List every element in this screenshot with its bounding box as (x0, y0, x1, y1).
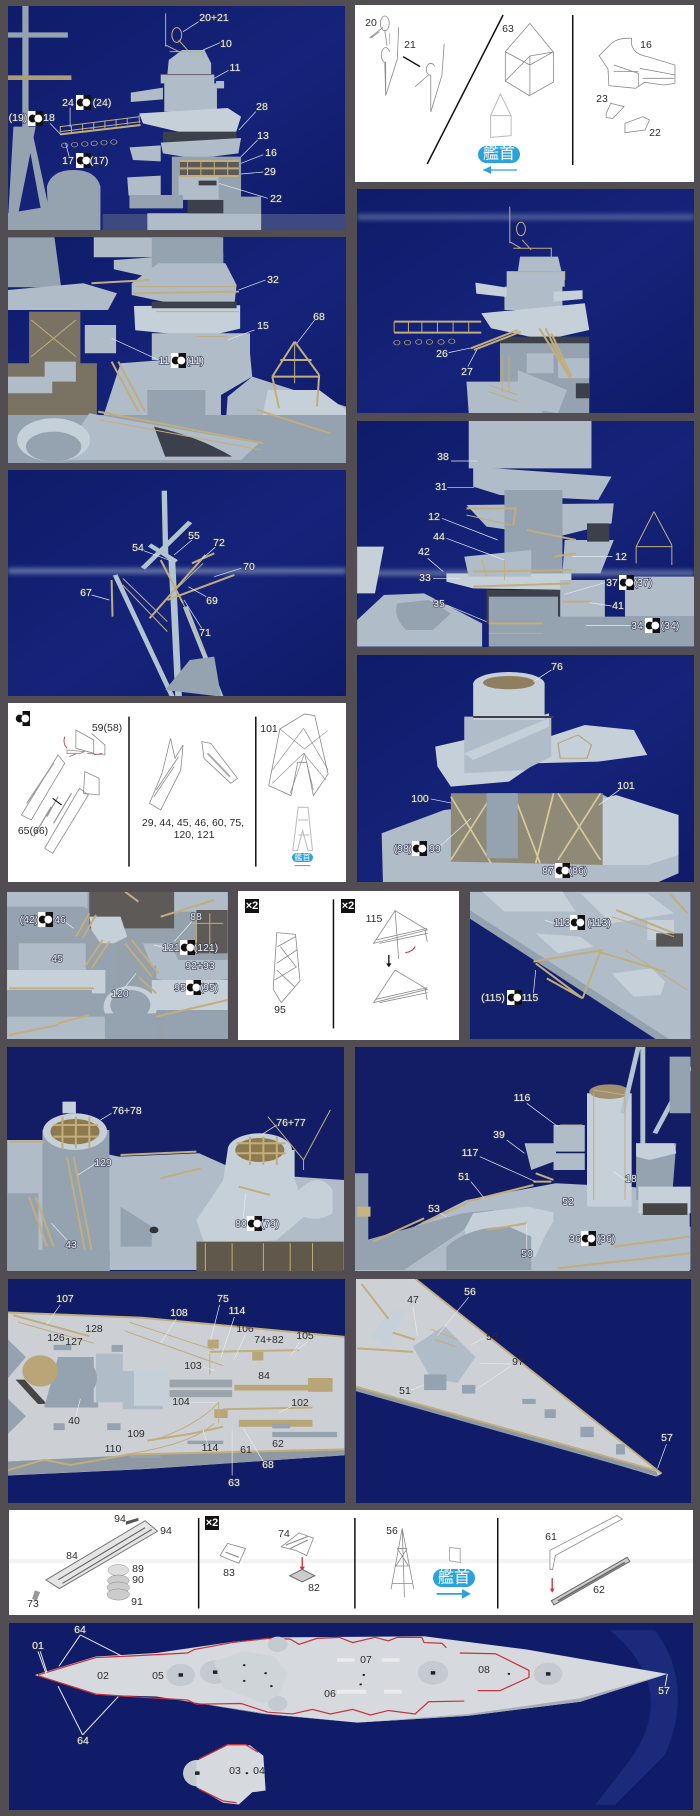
direction pill: bow: 艦首 (483, 144, 515, 162)
panel: diagram ladders and lattice mast (8, 703, 346, 882)
panel: crane on hull photo (470, 891, 691, 1040)
part labels on deck: 08 (478, 1664, 490, 1676)
part labels on deck (399, 1294, 524, 1397)
leaders (449, 348, 477, 367)
leaders (411, 1297, 666, 1468)
leaders (50, 22, 268, 198)
part labels: (37) (634, 577, 652, 589)
line art (21, 714, 328, 867)
part labels: 115 (522, 992, 539, 1004)
part labels: 37 (606, 577, 618, 589)
part labels on deck: 126 (47, 1332, 65, 1344)
photo backdrop (8, 6, 345, 230)
panel: full ship top view photo (9, 1623, 693, 1810)
photo backdrop (8, 237, 346, 415)
part labels: 13 (257, 130, 269, 142)
part labels: 18 (625, 1173, 637, 1185)
part labels on deck (47, 1323, 314, 1456)
direction pill: bow: 艦首 (294, 852, 310, 862)
model: bow (356, 1279, 662, 1476)
panel: deck detail photo (7, 892, 228, 1040)
part labels on deck: 109 (127, 1428, 145, 1440)
part labels on deck: 104 (172, 1396, 190, 1408)
part labels (365, 17, 661, 139)
paper fold (357, 214, 694, 220)
part labels: 92+93 (185, 960, 215, 972)
part labels: 76+77 (276, 1117, 306, 1129)
part labels: 34 (631, 620, 643, 632)
part labels: (121) (194, 942, 218, 954)
part labels: 68 (262, 1459, 274, 1471)
part labels: 56 (464, 1286, 476, 1298)
part labels: 12 (615, 551, 627, 563)
panel: tower with searchlight platform (357, 189, 694, 413)
part labels: 94 (114, 1513, 126, 1525)
leaders (428, 461, 630, 626)
part labels: 62 (593, 1584, 605, 1596)
part labels: (113) (587, 917, 611, 929)
part labels: 11 (230, 62, 241, 74)
part labels: 31 (435, 481, 447, 493)
part labels: 18 (43, 112, 55, 124)
part labels: 84 (66, 1550, 78, 1562)
leaders (38, 1635, 667, 1735)
photo backdrop (470, 891, 691, 1039)
part labels on deck: 110 (105, 1443, 122, 1455)
part labels (65, 1105, 306, 1251)
model: hull, turret and funnel (355, 1047, 691, 1277)
part labels: 120, 121 (174, 829, 215, 841)
part labels: 32 (267, 274, 279, 286)
part labels: 57 (658, 1685, 670, 1697)
part labels: (11) (186, 355, 204, 367)
part labels: 67 (80, 587, 92, 599)
x2 badge right: ×2 (342, 900, 354, 912)
line art (370, 15, 675, 174)
part labels: (98) (394, 843, 412, 855)
part labels: 35 (433, 598, 445, 610)
diagram background (238, 891, 459, 1040)
part labels: 56 (386, 1525, 398, 1537)
part labels (464, 1286, 673, 1444)
part labels: 76 (551, 661, 563, 673)
part labels: 42 (418, 546, 430, 558)
part labels: 61 (545, 1531, 557, 1543)
part labels on deck: 40 (68, 1415, 80, 1427)
part labels: 72 (213, 537, 225, 549)
part labels: 129 (94, 1157, 112, 1169)
part labels on deck: 103 (184, 1360, 202, 1372)
part labels: 51 (458, 1171, 470, 1183)
part labels (32, 1624, 670, 1747)
marker icon (15, 711, 30, 726)
part labels: 36 (569, 1233, 581, 1245)
leaders (51, 1113, 277, 1240)
part labels on deck: 61 (240, 1444, 252, 1456)
part labels: (115) (481, 992, 505, 1004)
part labels: 20+21 (199, 12, 229, 24)
part labels on deck: 03 (229, 1765, 241, 1777)
part labels: 76+78 (112, 1105, 142, 1117)
x2 badge left: ×2 (246, 900, 258, 912)
part labels: 59(58) (92, 722, 122, 734)
leaders (440, 1103, 627, 1250)
part labels on deck: 106 (236, 1323, 254, 1335)
part labels (80, 530, 255, 639)
part labels: 68 (313, 311, 325, 323)
part labels on deck: 47 (407, 1294, 419, 1306)
part labels: 11 (159, 355, 170, 367)
part labels: 117 (462, 1147, 479, 1159)
model: tower (394, 207, 589, 413)
photo backdrop (9, 1623, 693, 1810)
part labels (18, 722, 278, 841)
panel: diagram parts 95 and 115 (238, 891, 459, 1040)
part labels on deck: 114 (202, 1442, 219, 1454)
part labels: 100 (411, 793, 429, 805)
part labels: (17) (90, 155, 108, 167)
part labels on deck: 105 (296, 1330, 314, 1342)
part labels on deck: 102 (291, 1397, 309, 1409)
part labels: 63 (228, 1477, 240, 1489)
photo backdrop (7, 1047, 344, 1271)
part labels: (19) (9, 112, 27, 124)
part labels: 43 (65, 1239, 77, 1251)
photo backdrop (357, 189, 694, 413)
part labels: (34) (661, 620, 679, 632)
leaders (92, 540, 241, 628)
part labels: 16 (265, 147, 277, 159)
part labels: 17 (62, 155, 74, 167)
part labels: 10 (220, 38, 232, 50)
leaders (431, 670, 621, 847)
part labels: (95) (200, 982, 218, 994)
panel: deck from above photo (6, 1279, 345, 1503)
part labels (394, 661, 635, 878)
part labels (274, 913, 383, 1016)
part labels on deck: 127 (65, 1336, 83, 1348)
part labels: 28 (256, 101, 268, 113)
part labels: (36) (597, 1233, 615, 1245)
part labels: 21 (404, 39, 416, 51)
part labels: 45 (51, 953, 63, 965)
part labels: 46 (54, 914, 66, 926)
diagram background (8, 703, 346, 882)
part labels: 115 (366, 913, 383, 925)
panel: funnel and lattice photo (357, 655, 694, 885)
part labels: 120 (111, 988, 129, 1000)
part labels: 63 (502, 23, 514, 35)
part labels: 64 (74, 1624, 86, 1636)
leaders (47, 1305, 308, 1475)
part labels: 27 (461, 366, 473, 378)
paper fold (357, 570, 694, 576)
part labels (56, 1293, 274, 1489)
panel: aft superstructure photo (355, 1047, 691, 1277)
part labels on deck: 04 (253, 1765, 265, 1777)
velvet highlight (595, 1630, 678, 1805)
photo backdrop (355, 1047, 691, 1271)
panel: funnels close-up photo (7, 1047, 344, 1272)
part labels (428, 1092, 637, 1260)
part labels: 23 (596, 93, 608, 105)
photo backdrop (8, 470, 346, 696)
part labels: 83 (223, 1567, 235, 1579)
part labels on deck: 05 (152, 1670, 164, 1682)
part labels: 107 (56, 1293, 74, 1305)
leaders (533, 920, 554, 993)
part labels: 89 (132, 1563, 144, 1575)
part labels: 29, 44, 45, 46, 60, 75, (142, 817, 244, 829)
panel: bridge tower photo top (8, 5, 346, 230)
part labels on deck: 62 (272, 1438, 284, 1450)
part labels: 101 (260, 723, 278, 735)
part labels: 39 (493, 1129, 505, 1141)
part labels (159, 274, 325, 368)
part labels: 44 (433, 531, 445, 543)
part labels on deck (97, 1654, 490, 1777)
part labels on deck: 128 (85, 1323, 103, 1335)
part labels: 114 (229, 1305, 246, 1317)
part labels on deck: 06 (324, 1688, 336, 1700)
photo backdrop (356, 1279, 691, 1503)
leaders (112, 280, 315, 360)
part labels: 95 (274, 1004, 286, 1016)
part labels on deck: 97 (512, 1356, 524, 1368)
part labels: 82 (308, 1582, 320, 1594)
part labels: 90 (132, 1574, 144, 1586)
part labels: 75 (217, 1293, 229, 1305)
photo backdrop (7, 892, 228, 1039)
panel: bow photo (356, 1279, 691, 1503)
part labels: 116 (514, 1092, 531, 1104)
line art (32, 1515, 630, 1608)
model: funnels and deck (7, 1102, 344, 1272)
part labels (27, 1513, 605, 1610)
part labels: 54 (132, 542, 144, 554)
model: mast (112, 491, 234, 697)
photo backdrop (357, 421, 694, 647)
part labels: 12 (428, 511, 440, 523)
photo backdrop (8, 1279, 345, 1503)
part labels: 52 (562, 1196, 574, 1208)
part labels: 20 (365, 17, 377, 29)
part labels: 24 (62, 97, 74, 109)
model: deck top view (6, 1312, 345, 1475)
part labels: 88 (190, 911, 202, 923)
line art (273, 899, 428, 1028)
part labels (9, 12, 282, 205)
part labels (20, 911, 218, 1000)
part labels: 65(66) (18, 825, 48, 837)
model: hull top view (35, 1636, 667, 1804)
paper fold (8, 568, 346, 574)
part labels: 41 (612, 600, 624, 612)
part labels: 95 (174, 982, 186, 994)
panel: diagram parts row (9, 1510, 693, 1615)
part labels on deck: 02 (97, 1670, 109, 1682)
part labels: 99 (429, 843, 441, 855)
part labels on deck: 07 (360, 1654, 372, 1666)
part labels: 70 (243, 561, 255, 573)
part labels: 22 (649, 127, 661, 139)
part labels: 29 (264, 166, 276, 178)
part labels: 91 (131, 1596, 143, 1608)
part labels: 22 (270, 193, 282, 205)
part labels: (24) (93, 97, 111, 109)
part labels: 38 (437, 451, 449, 463)
part labels: 108 (170, 1307, 188, 1319)
part labels: 16 (640, 39, 652, 51)
panel: diagram parts 20 to 23 and 63 (355, 5, 694, 182)
diagram background (355, 5, 694, 182)
model: lower tower (357, 421, 694, 647)
part labels: 33 (419, 572, 431, 584)
diagram background (9, 1510, 693, 1615)
part labels (436, 350, 473, 376)
part labels: 55 (188, 530, 200, 542)
model: deck, tub and stairs (7, 892, 228, 1040)
direction pill: bow: 艦首 (438, 1568, 470, 1586)
part labels: 121 (162, 942, 180, 954)
part labels on deck: 51 (399, 1385, 411, 1397)
part labels: 69 (206, 595, 218, 607)
fold shading (9, 1559, 693, 1563)
panel: lower tower photo (357, 421, 694, 647)
part labels: 26 (436, 348, 448, 360)
part labels: 53 (428, 1203, 440, 1215)
part labels on deck: 84 (258, 1370, 270, 1382)
part labels: 101 (617, 780, 635, 792)
direction pill: bow (292, 852, 313, 862)
model: tower and superstructure (8, 237, 347, 463)
part labels: 113 (554, 917, 571, 929)
part labels: (79) (261, 1218, 279, 1230)
part labels: 01 (32, 1640, 44, 1652)
part labels (481, 915, 611, 1005)
panel: tower mid section photo (8, 237, 347, 463)
panel: mast photo (8, 470, 346, 697)
part labels: 87 (542, 865, 554, 877)
part labels: 71 (199, 627, 211, 639)
model: hull (470, 892, 691, 1040)
model: funnel (382, 672, 679, 885)
part labels: (42) (20, 914, 38, 926)
part labels: 50 (521, 1248, 533, 1260)
part labels: 57 (661, 1432, 673, 1444)
part labels: (86) (569, 865, 587, 877)
part labels: 74 (278, 1528, 290, 1540)
leaders (65, 922, 192, 990)
part labels: 80 (235, 1218, 247, 1230)
part labels: 15 (257, 320, 269, 332)
model: foremast and tower (8, 5, 346, 230)
part labels on deck: 74+82 (254, 1334, 284, 1346)
part labels: 73 (27, 1598, 39, 1610)
photo backdrop (357, 655, 694, 882)
x2 badge: ×2 (206, 1517, 218, 1529)
part labels on deck: 50 (486, 1331, 498, 1343)
part labels: 64 (77, 1735, 89, 1747)
part labels (418, 451, 679, 633)
part labels: 94 (160, 1525, 172, 1537)
